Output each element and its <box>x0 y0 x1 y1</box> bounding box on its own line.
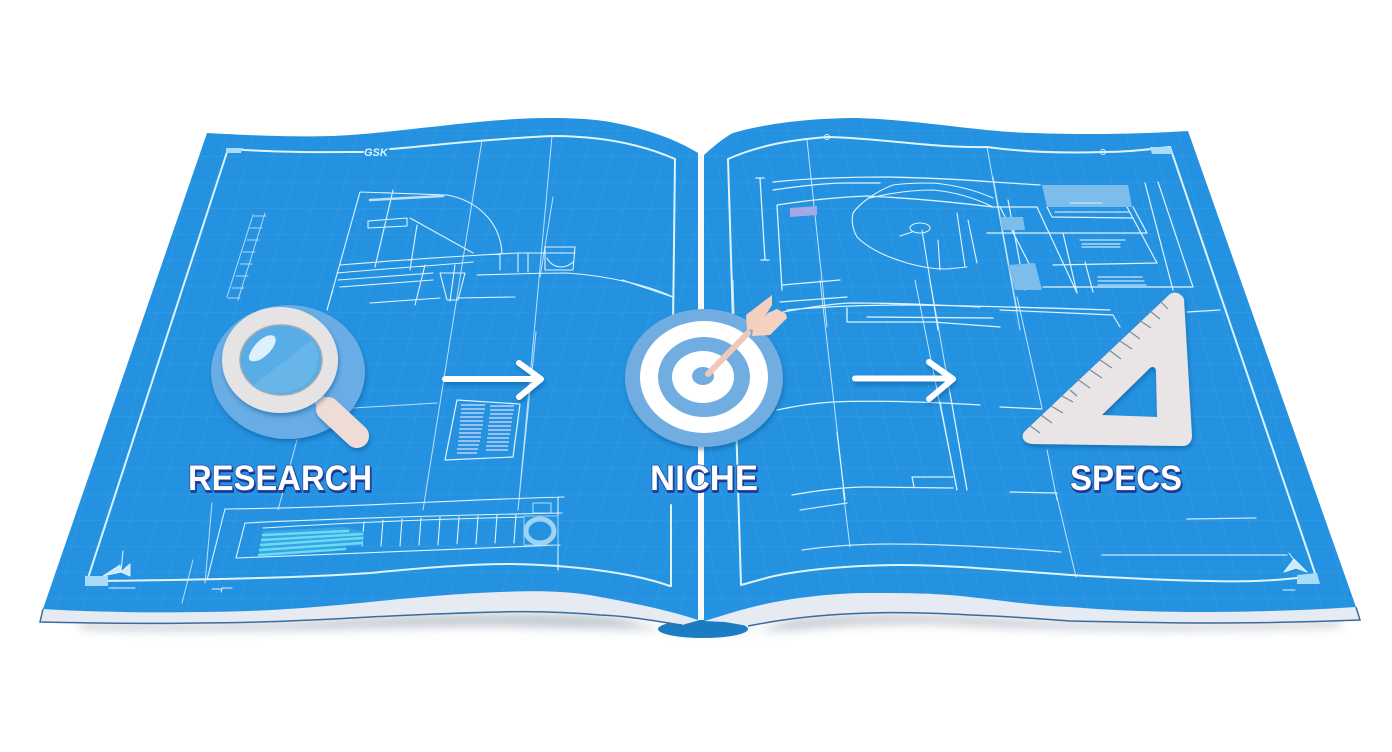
lens <box>240 325 322 395</box>
target rings <box>625 309 783 447</box>
right purple swatch <box>790 206 817 217</box>
right upper sketch <box>756 177 1110 327</box>
book shadow <box>80 613 1340 632</box>
icon: set square ruler <box>1023 293 1192 446</box>
right page block <box>704 118 1360 626</box>
book spine tab <box>658 620 748 638</box>
right page frame drawing <box>622 134 1320 590</box>
left lower sketch <box>207 497 564 580</box>
left page frame drawing: GSK <box>364 147 389 159</box>
icon: target with dart <box>625 295 787 447</box>
left page block <box>40 118 700 625</box>
left vertical guides <box>182 136 553 603</box>
left page bottom edge <box>40 609 682 625</box>
left text block <box>445 400 520 460</box>
right vertical guides <box>733 140 1076 577</box>
icon: magnifying glass on disc <box>211 305 365 439</box>
center fold line <box>699 155 703 620</box>
right circular plan <box>852 183 993 330</box>
left compass mark <box>103 551 130 576</box>
left pale bar <box>370 196 443 200</box>
ruler ticks <box>1029 301 1168 433</box>
label: niche: NICHE <box>650 459 758 498</box>
right frame <box>728 137 1318 585</box>
right page surface <box>704 118 1356 621</box>
left upper sketch <box>327 190 673 310</box>
lens highlight <box>249 335 276 361</box>
handle <box>316 396 329 411</box>
right plan structure <box>987 182 1193 293</box>
left page surface <box>43 118 698 620</box>
dart flights <box>746 295 772 330</box>
label: specs: SPECS <box>1070 459 1182 498</box>
left frame corner and title marks <box>226 148 243 153</box>
arrow: niche to specs <box>855 362 953 399</box>
left page paper edges <box>40 591 700 625</box>
right page paper edges <box>704 593 1360 626</box>
right page bottom edge <box>748 607 1360 626</box>
label: research: RESEARCH <box>188 459 372 498</box>
right mid sketch <box>622 280 1220 500</box>
left lower ring <box>524 516 558 545</box>
left page frame drawing <box>85 136 675 603</box>
set square body <box>1023 293 1192 446</box>
left frame <box>87 136 675 586</box>
arrow: research to niche <box>445 363 541 397</box>
disc <box>211 305 365 439</box>
ring <box>222 307 338 413</box>
right frame corner and compass <box>1150 147 1173 154</box>
right lower sketch <box>800 503 1287 555</box>
dart shaft <box>708 333 748 374</box>
left scale <box>227 213 266 300</box>
